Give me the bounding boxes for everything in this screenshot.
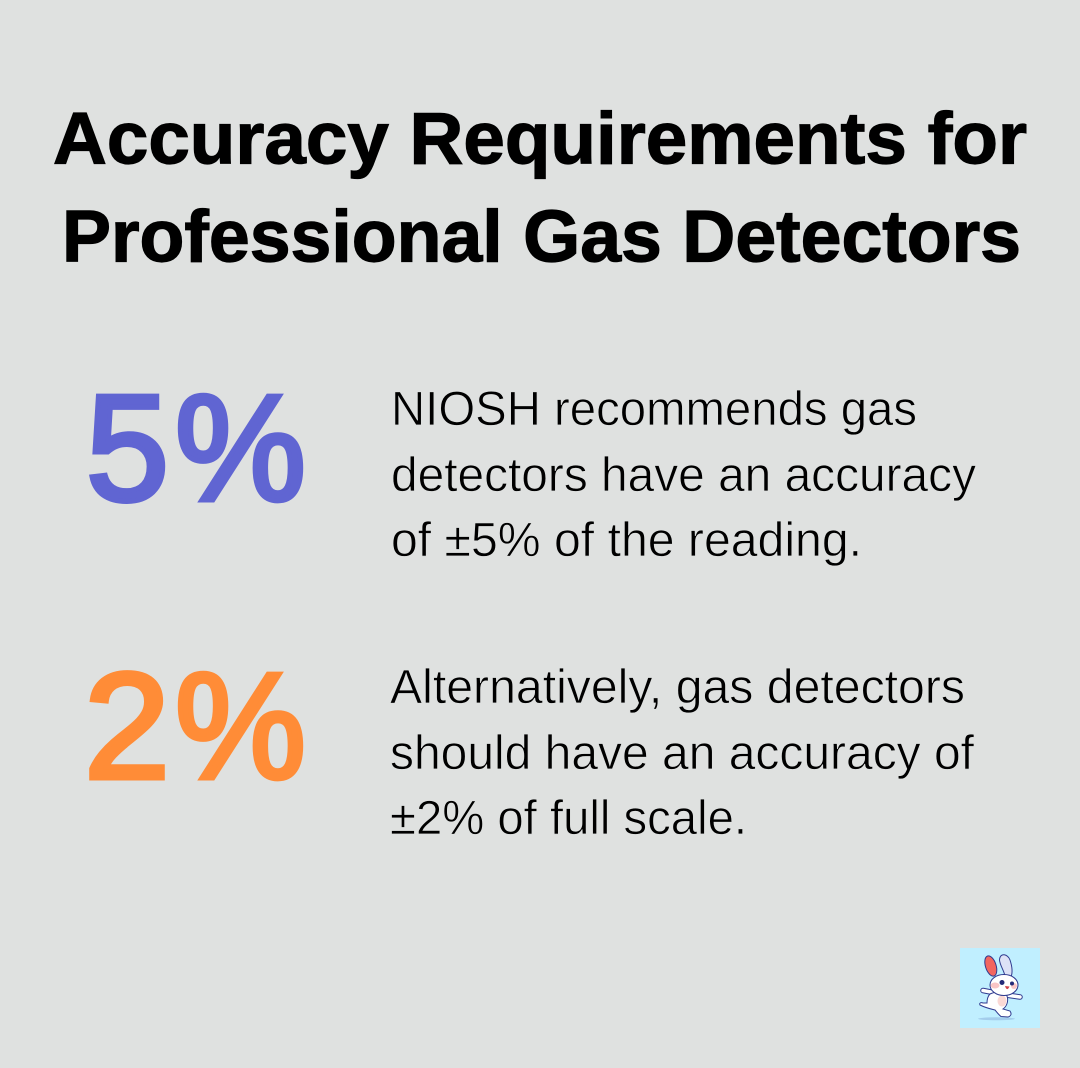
title: Accuracy Requirements for [53,98,1027,180]
stat: 2% [84,641,306,810]
icon: bunny head [990,974,1018,996]
icon: bunny arms [983,990,1020,997]
text block: full scale alternative: Alternatively, gas detectors [390,661,965,714]
icon: running bunny logo [960,948,1040,1028]
icon: bunny body [980,992,1011,1017]
text block: NIOSH recommendation [391,383,976,567]
text block: NIOSH recommendation: NIOSH recommends gas [391,383,917,436]
stat: 2%: 2 [84,641,170,810]
icon: bunny right ear [1000,955,1012,977]
stat: 2%: % [175,641,306,810]
text block: full scale alternative: ±2% of full scale. [390,792,747,845]
icon: bunny left ear [983,954,999,978]
stat: 5%: 5 [86,363,169,532]
stat: 5%: % [175,363,306,532]
icon: bunny belly [998,996,1006,1006]
stat: 5% [86,363,306,532]
text block: NIOSH recommendation: of ±5% of the reading. [391,514,862,567]
icon: bunny face [990,980,1017,989]
text block: NIOSH recommendation: detectors have an accuracy [391,449,976,502]
title [53,98,1027,278]
text block: full scale alternative [390,661,975,845]
title: Professional Gas Detectors [62,196,1021,278]
text block: full scale alternative: should have an accuracy of [390,727,975,780]
